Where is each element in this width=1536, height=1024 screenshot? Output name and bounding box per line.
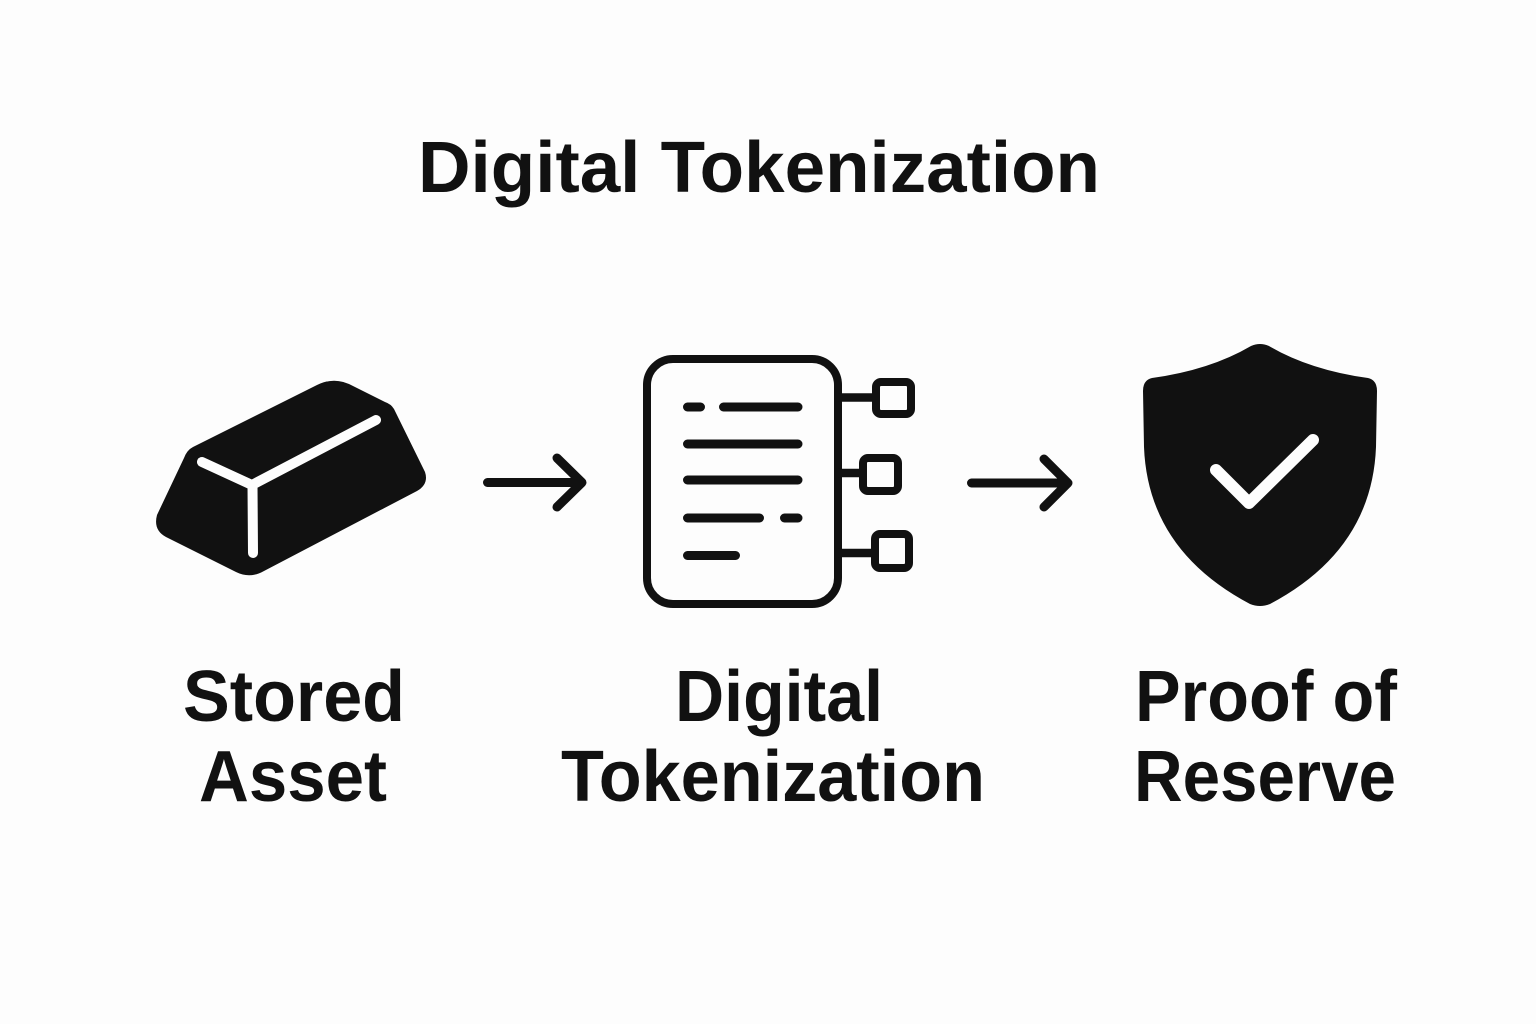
title: Digital Tokenization [418,128,1100,208]
label: digital tokenization: Digital [675,657,883,737]
icon: gold bar [156,381,426,575]
label: proof of reserve: Proof of [1135,657,1398,737]
label: stored asset: Stored [183,657,405,737]
label: stored asset [183,657,405,817]
arrow: bar to document [488,458,582,507]
label: stored asset: Asset [199,737,387,817]
arrow: document to shield [972,459,1068,507]
label: digital tokenization [561,657,985,817]
label: proof of reserve [1134,657,1398,817]
label: digital tokenization: Tokenization [561,737,985,817]
label: proof of reserve: Reserve [1134,737,1396,817]
icon: document with token nodes [647,359,911,604]
icon: shield with check [1143,344,1377,606]
